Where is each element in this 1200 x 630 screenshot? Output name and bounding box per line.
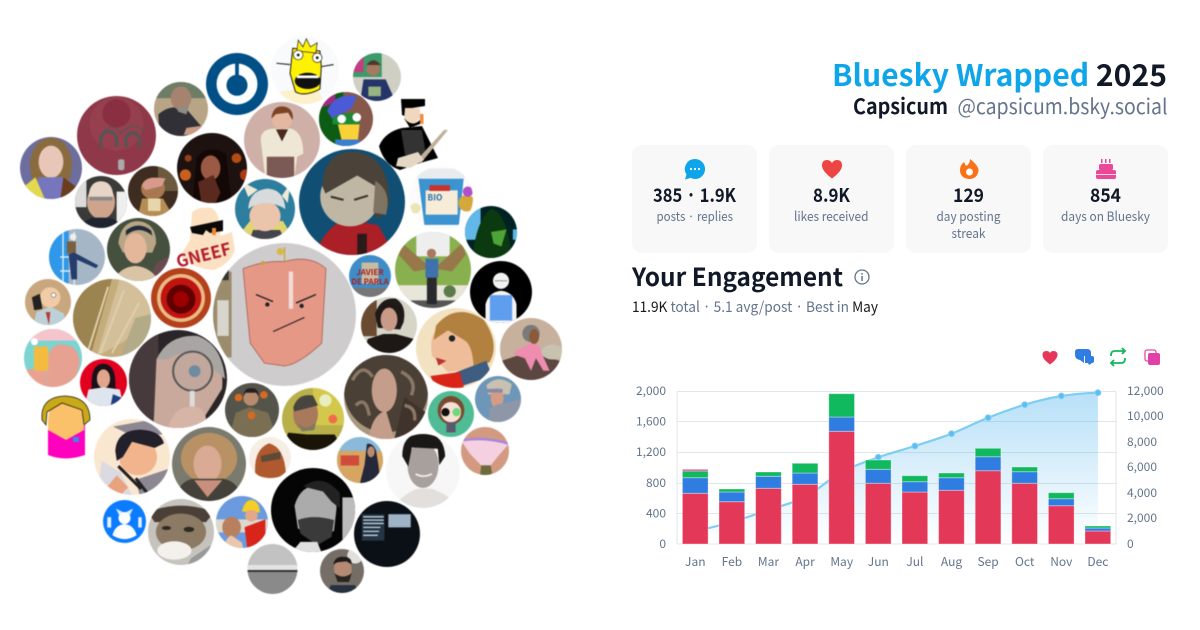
avatar cluster	[20, 36, 564, 594]
right axis labels: 6,000	[1127, 458, 1157, 475]
avatar: pink puppet on sofa	[500, 318, 562, 381]
bar: Jan	[682, 469, 708, 544]
engagement summary: 11.9K total · 5.1 avg/post · Best in May	[632, 296, 878, 317]
panel: likes	[769, 145, 894, 253]
bar: May	[829, 394, 854, 544]
bar: Nov	[1048, 493, 1074, 544]
avatar: worker on scaffold	[48, 228, 106, 286]
stat value: 129	[953, 181, 984, 208]
avatar: red glowing ring	[150, 267, 212, 329]
bar: Dec	[1085, 526, 1111, 544]
left axis labels	[636, 382, 666, 552]
bar: Jun	[865, 460, 891, 544]
stat label: days on Bluesky	[1061, 206, 1150, 225]
avatar: child in cream cardigan (old photo)	[244, 102, 320, 179]
avatar: baby in knitted viking hat	[234, 178, 296, 240]
stat value: 385 · 1.9K	[653, 181, 737, 208]
month labels: Oct	[1015, 553, 1035, 570]
avatar: big-eyed cartoon girl	[427, 390, 475, 438]
avatar: yellow cartoon screaming	[276, 37, 334, 104]
avatar: man in navy t-shirt	[352, 52, 402, 102]
bar: Mar	[756, 472, 781, 544]
avatar: Javier de Parla badge: JAVIER	[356, 267, 384, 278]
avatar: blue logo with devil	[102, 499, 147, 544]
avatar: painted girl portrait	[298, 148, 406, 256]
avatar: woman on red	[79, 358, 128, 406]
avatar: dark window lines	[353, 500, 421, 568]
avatar: bald man at table	[153, 81, 209, 137]
cumulative line	[695, 393, 1098, 532]
avatar: nurse on black	[469, 260, 533, 324]
month labels: Dec	[1087, 553, 1108, 570]
avatar: alien puppet	[127, 165, 179, 217]
left axis labels: 1,600	[636, 412, 666, 430]
cumulative area	[695, 393, 1098, 544]
avatar: Jane Austen portrait	[106, 217, 171, 282]
heading: Your Engagement: Your Engagement	[631, 258, 843, 294]
display name: Capsicum	[853, 91, 948, 121]
avatar: big pepper drawing with pen	[212, 242, 356, 386]
right axis labels: 8,000	[1127, 433, 1157, 450]
month labels: Mar	[758, 553, 779, 570]
avatar: green hooded figure	[464, 205, 518, 259]
panel: posts and replies	[632, 145, 757, 253]
right axis labels: 2,000	[1127, 509, 1157, 526]
avatar: Javier de Parla badge	[348, 254, 392, 298]
avatar: orange kigurumi man	[224, 382, 280, 438]
icon: replies bubbles	[1075, 349, 1094, 365]
bar: Sep	[975, 448, 1001, 544]
bar: Aug	[939, 473, 964, 544]
month labels: May	[830, 553, 854, 570]
month labels: Sep	[977, 553, 999, 570]
line markers	[875, 390, 1101, 460]
avatar: magnifying glass man	[128, 329, 228, 428]
avatar: hairy orange figure	[248, 437, 292, 480]
stat value: 854	[1090, 181, 1121, 208]
avatar: cartoon lady in magenta	[42, 396, 90, 458]
avatar: lilac underwear photo	[460, 426, 510, 476]
avatar: couple with yellow hat	[216, 495, 268, 549]
stat label: likes received	[794, 206, 868, 225]
avatar: bald man with glasses	[74, 175, 128, 229]
bar: Jul	[902, 476, 928, 544]
handle: @capsicum.bsky.social	[958, 91, 1168, 121]
left axis labels: 400	[646, 504, 666, 522]
avatar: GNEEF sunglasses figure	[173, 208, 235, 273]
stat label: streak	[952, 223, 986, 242]
avatar: man with glitter background	[281, 387, 345, 451]
stat value: 8.9K	[813, 181, 851, 208]
avatar: grey ship landscape	[246, 544, 298, 595]
avatar: otter with phone	[23, 328, 83, 388]
right axis labels	[1127, 382, 1164, 552]
stacked bars	[682, 394, 1111, 544]
month labels: Aug	[941, 553, 962, 570]
right axis labels: 0	[1127, 535, 1134, 552]
avatar: BIO tub	[410, 168, 474, 226]
left axis labels: 800	[646, 474, 666, 491]
avatar: manga character	[94, 418, 170, 496]
avatar: Javier de Parla badge: DE PARLA	[351, 276, 390, 287]
month labels: Jun	[868, 553, 889, 570]
icon: quote squares	[1145, 350, 1160, 365]
chart: monthly engagement	[636, 382, 1164, 570]
right axis labels: 10,000	[1127, 407, 1164, 424]
left axis labels: 1,200	[636, 443, 666, 460]
grid lines	[677, 392, 1116, 544]
avatar: close-up blonde hair	[72, 278, 152, 358]
avatar: woman in yellow jacket	[19, 136, 83, 200]
panel: days on Bluesky	[1043, 145, 1168, 253]
month labels	[685, 553, 1108, 570]
avatar: bearded man grey background	[319, 548, 365, 594]
legend icons	[1042, 348, 1160, 366]
bar: Feb	[719, 489, 745, 544]
avatar: GNEEF sunglasses figure: GNEEF	[173, 235, 233, 273]
icon: likes heart	[1042, 351, 1058, 364]
panel: streak	[906, 145, 1031, 253]
avatar: red knitted blob	[76, 95, 157, 176]
icon: repost arrows	[1111, 348, 1125, 366]
avatar: blonde woman selfie	[171, 426, 247, 502]
month labels: Feb	[722, 553, 742, 570]
avatar: Tintin-style cartoon	[24, 278, 72, 326]
bar: Apr	[792, 463, 818, 544]
title: Bluesky Wrapped 2025	[832, 51, 1167, 95]
avatar: guitarist illustration	[379, 99, 448, 170]
month labels: Jan	[685, 553, 706, 570]
month labels: Jul	[906, 553, 923, 570]
avatar: BIO tub: BIO	[428, 192, 442, 204]
stat label: day posting	[936, 206, 1001, 225]
avatar: smoking woman with pumpkins	[176, 132, 248, 204]
icon: heart	[822, 160, 842, 178]
month labels: Nov	[1050, 553, 1073, 570]
icon: cake	[1096, 159, 1116, 179]
right axis labels: 4,000	[1127, 484, 1157, 501]
avatar: blue ring logo	[205, 52, 269, 116]
icon: info	[855, 270, 869, 284]
stat label: posts · replies	[656, 206, 733, 225]
avatar: Elvis portrait	[400, 433, 449, 508]
avatar: woman with silver helmet	[474, 375, 522, 423]
left axis labels: 0	[659, 535, 666, 552]
avatar: green-masked yellow cartoon	[318, 91, 374, 147]
icon: chat bubble	[685, 159, 705, 180]
avatar: curly-haired woman	[343, 354, 429, 440]
icon: flame	[960, 159, 979, 179]
stat label	[936, 206, 1001, 242]
avatar: man with gold wings on green wall	[394, 232, 472, 309]
left axis labels: 2,000	[636, 382, 666, 399]
avatar: tabby cat	[148, 498, 214, 566]
avatar: woman on city terrace	[336, 436, 384, 484]
avatar: black and white bearded man	[270, 467, 356, 552]
avatar: boy with fringe	[416, 308, 496, 389]
bar: Oct	[1012, 467, 1038, 544]
right axis labels: 12,000	[1127, 382, 1164, 399]
month labels: Apr	[795, 553, 815, 570]
avatar: dark-haired woman	[360, 296, 418, 354]
